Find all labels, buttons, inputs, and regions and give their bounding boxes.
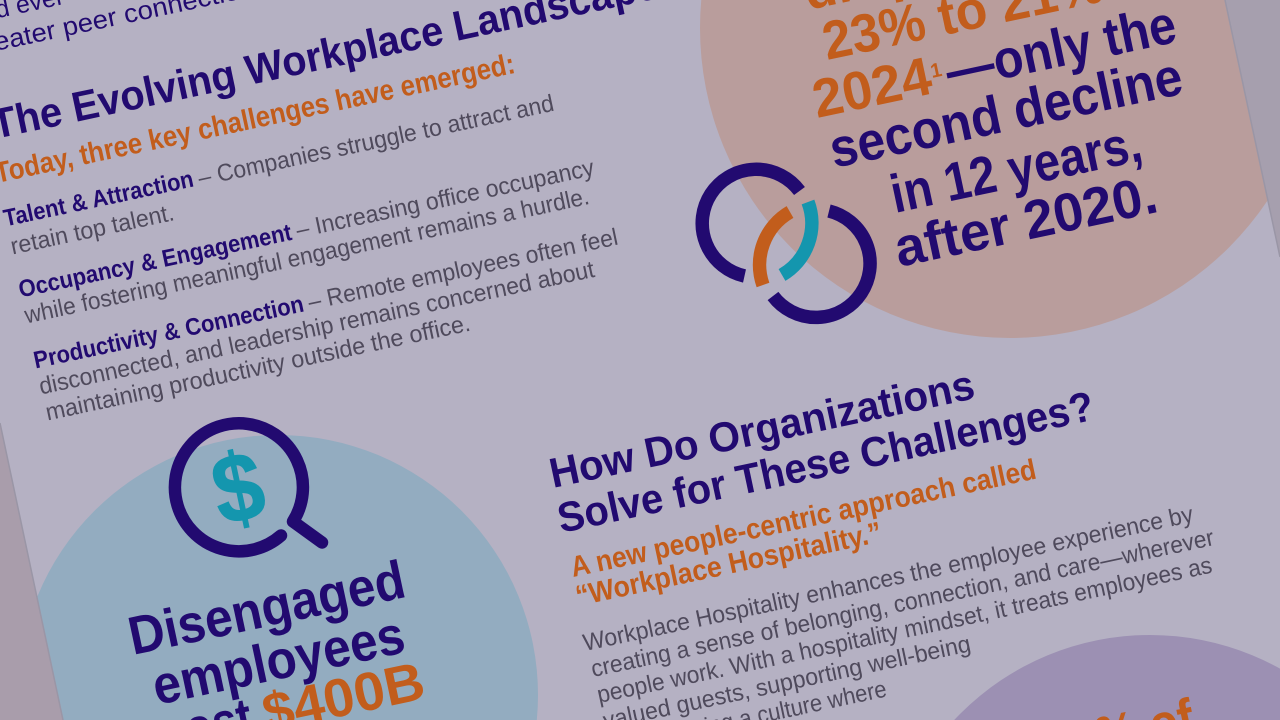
- item: productivity and connection: Productivity & Connection: [31, 291, 306, 374]
- circle: blue stat background: [18, 435, 538, 720]
- item: occupancy and engagement: while fostering meaningful engagement remains a hurdle.: [21, 183, 592, 330]
- stat: engagement decline: in 12 years,: [885, 113, 1147, 225]
- stat: engagement decline: 1: [928, 59, 944, 83]
- stat: engagement decline: second decline: [824, 46, 1188, 180]
- stat: disengaged employees cost: employees: [147, 605, 410, 717]
- subheading: people-centric approach: A new people-centric approach called: [568, 454, 1039, 584]
- stat: engagement decline: 2024: [807, 46, 937, 130]
- item: productivity and connection: disconnected, and leadership remains concerned about: [37, 256, 597, 400]
- text block: workplace hospitality description: people work. With a hospitality mindset, it treats employees as: [595, 552, 1215, 709]
- icon: magnifying glass with dollar: [175, 423, 322, 551]
- stat: disengaged employees cost: Disengaged: [123, 550, 410, 667]
- subheading: three challenges: Today, three key challenges have emerged:: [0, 48, 518, 190]
- item: talent and attraction: Talent & Attraction: [1, 166, 196, 232]
- text block: workplace hospitality description: Workplace Hospitality enhances the employee experience by: [581, 501, 1196, 657]
- icon: magnifying glass with dollar: $: [203, 430, 274, 546]
- icon: interlocking rings: [702, 169, 870, 317]
- stat: engagement decline: after 2020.: [889, 165, 1163, 279]
- stat: engagement decline: [798, 0, 1188, 279]
- text block: workplace hospitality description: creating a sense of belonging, connection, and care—wherever: [589, 524, 1216, 683]
- item: occupancy and engagement: Occupancy & Engagement: [16, 219, 294, 303]
- item: occupancy and engagement: – Increasing office occupancy: [294, 154, 597, 244]
- stat: disengaged employees cost: [123, 550, 430, 720]
- circle: peach stat background: [700, 0, 1280, 338]
- subheading: people-centric approach: “Workplace Hospitality.”: [573, 517, 885, 613]
- circle: purple stat background: [954, 635, 1280, 720]
- text block: challenges list: [1, 90, 620, 426]
- item: productivity and connection: maintaining productivity outside the office.: [43, 310, 473, 426]
- item: talent and attraction: retain top talent.: [8, 199, 177, 260]
- item: talent and attraction: [1, 90, 556, 260]
- heading: how organizations solve: Solve for These Challenges?: [553, 382, 1098, 542]
- item: productivity and connection: – Remote employees often feel: [306, 224, 620, 316]
- heading: how organizations solve: How Do Organizations: [545, 361, 978, 497]
- item: talent and attraction: – Companies struggle to attract and: [196, 90, 556, 192]
